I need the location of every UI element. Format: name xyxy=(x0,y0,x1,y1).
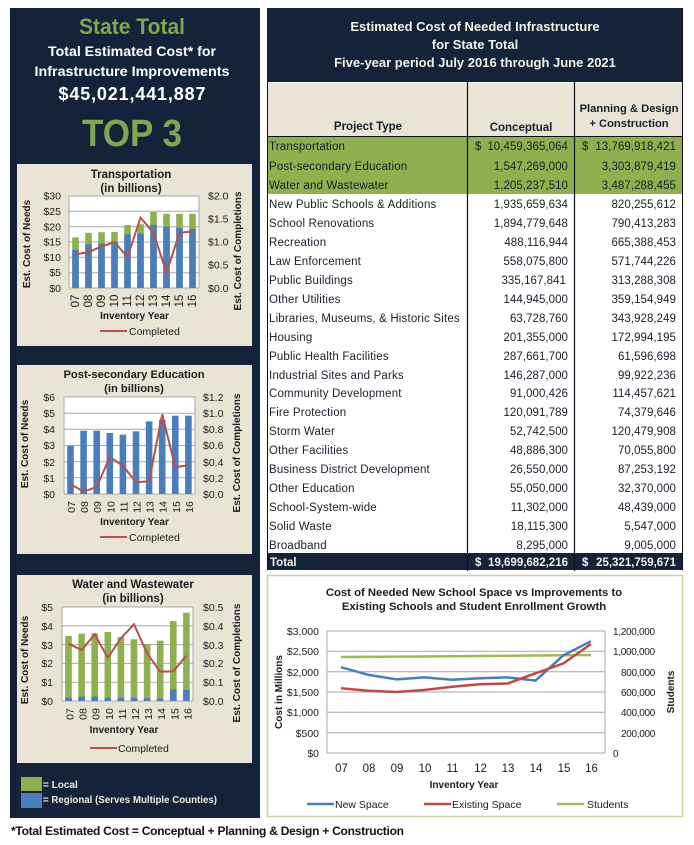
row: Other Facilities: 70,055,800 xyxy=(618,445,676,457)
left axis labels: $500 xyxy=(296,728,319,740)
row: Total xyxy=(267,553,683,570)
year labels: 12 xyxy=(132,501,144,513)
row: Housing: 172,994,195 xyxy=(611,332,676,344)
legend: Existing Space xyxy=(452,799,522,811)
right axis labels: $0.5 xyxy=(208,260,229,272)
row: Industrial Sites and Parks xyxy=(269,370,676,382)
left axis labels: $1 xyxy=(41,677,53,689)
row: New Public Schools & Additions: New Public Schools & Additions xyxy=(269,199,437,211)
row: Fire Protection: 74,379,646 xyxy=(618,407,676,419)
row: Broadband: 9,005,000 xyxy=(624,540,676,552)
row: Transportation: 13,769,918,421 xyxy=(595,141,676,153)
row: Libraries, Museums, & Historic Sites xyxy=(269,313,676,325)
row: Storm Water xyxy=(269,426,676,438)
completed line xyxy=(68,624,186,672)
right axis labels xyxy=(203,392,224,501)
row: Broadband: Broadband xyxy=(269,540,327,552)
left axis labels: $15 xyxy=(43,236,61,248)
legend: completed xyxy=(90,743,169,755)
row: Solid Waste: 5,547,000 xyxy=(624,521,676,533)
left axis labels: $0 xyxy=(43,489,55,501)
row: Public Health Facilities xyxy=(269,351,676,363)
year labels: 11 xyxy=(447,763,458,775)
axis titles: Inventory Year xyxy=(430,780,498,791)
row: Housing xyxy=(269,332,676,344)
column headers: Conceptual xyxy=(490,122,552,134)
year labels xyxy=(335,763,598,775)
row: Post-secondary Education xyxy=(269,161,676,173)
right axis labels: $0.1 xyxy=(203,677,224,689)
right axis labels xyxy=(203,602,224,708)
axis titles: Est. Cost of Needs xyxy=(20,615,31,704)
year labels: 13 xyxy=(148,295,160,307)
right axis labels: 800,000 xyxy=(621,668,656,679)
left axis labels: $5 xyxy=(49,267,61,279)
right axis labels: 600,000 xyxy=(621,688,656,699)
axis titles: Cost in Millions xyxy=(274,655,285,729)
left axis labels: $0 xyxy=(49,283,61,295)
right axis labels: 0 xyxy=(613,749,619,760)
left axis labels: $5 xyxy=(41,602,53,614)
left axis labels: $3,000 xyxy=(287,626,319,638)
row: School-System-wide xyxy=(269,502,676,514)
year labels: 11 xyxy=(118,501,130,512)
year labels: 16 xyxy=(182,708,194,720)
year labels: 09 xyxy=(92,501,104,513)
column headers: + Construction xyxy=(589,118,669,130)
right axis labels: $0.0 xyxy=(203,696,224,708)
row: Broadband xyxy=(269,540,676,552)
right axis labels xyxy=(613,627,656,760)
left axis labels: $2,500 xyxy=(287,646,319,658)
row: Recreation: 488,116,944 xyxy=(504,237,569,249)
year labels: 14 xyxy=(158,501,170,513)
row: Other Education xyxy=(269,483,676,495)
row: Public Buildings: 313,288,308 xyxy=(611,275,676,287)
row: New Public Schools & Additions: 1,935,659,634 xyxy=(494,199,569,211)
row: Transportation: $ xyxy=(582,141,589,153)
row: Storm Water: Storm Water xyxy=(269,426,335,438)
row: Other Utilities: Other Utilities xyxy=(269,294,341,306)
panel: table header: Estimated Cost of Needed Infrastructure xyxy=(350,19,600,34)
legend: completed: Completed xyxy=(129,532,180,544)
year labels: 12 xyxy=(130,708,142,720)
row: Transportation: Transportation xyxy=(269,141,345,153)
year labels: 07 xyxy=(335,763,348,775)
chart title: (in billions) xyxy=(104,383,164,395)
row: Housing: Housing xyxy=(269,332,312,344)
left axis labels: $0 xyxy=(307,748,319,760)
left axis labels: $2,000 xyxy=(287,667,319,679)
row: Industrial Sites and Parks: Industrial Sites and Parks xyxy=(269,370,404,382)
year labels: 14 xyxy=(530,763,543,775)
row: Transportation xyxy=(269,141,676,153)
year labels: 08 xyxy=(363,763,375,775)
year labels: 09 xyxy=(91,708,103,720)
row: Business District Development: Business District Development xyxy=(269,464,431,476)
row: Law Enforcement xyxy=(269,256,676,268)
row: Law Enforcement: 558,075,800 xyxy=(503,256,568,268)
year labels: 13 xyxy=(145,501,157,513)
row: Other Education: Other Education xyxy=(269,483,355,495)
row: Transportation: 10,459,365,064 xyxy=(487,141,569,153)
column headers: Project Type xyxy=(334,121,402,133)
heading: TOP 3: TOP 3 xyxy=(82,113,182,155)
right axis labels: $0.4 xyxy=(203,621,224,633)
row: Recreation: Recreation xyxy=(269,237,326,249)
axis titles: Est. Cost of Completions xyxy=(232,603,243,722)
row: Industrial Sites and Parks: 146,287,000 xyxy=(503,370,568,382)
legend: Students xyxy=(587,799,628,811)
row: Total: $ xyxy=(582,557,589,569)
row: Public Buildings xyxy=(269,275,676,287)
year labels: 15 xyxy=(174,295,186,307)
row: Other Facilities: 48,886,300 xyxy=(510,445,568,457)
right axis labels: $0.0 xyxy=(203,489,224,501)
line: Students xyxy=(341,655,591,657)
row: Public Buildings: 335,167,841 xyxy=(501,275,566,287)
right axis labels: 200,000 xyxy=(621,729,656,740)
panel: table header xyxy=(267,8,683,82)
year labels xyxy=(66,501,196,513)
row: Post-secondary Education: 3,303,879,419 xyxy=(602,161,676,173)
row: Total: $ xyxy=(475,557,482,569)
right axis labels: $0.2 xyxy=(203,658,224,670)
right axis labels: $0.4 xyxy=(203,457,224,469)
stacked bars xyxy=(72,212,196,288)
year labels: 07 xyxy=(64,708,76,720)
year labels: 08 xyxy=(83,295,95,307)
left axis labels: $3 xyxy=(43,440,55,452)
chart panel: Transportation xyxy=(17,164,252,346)
panel: left sidebar xyxy=(10,8,260,818)
right axis labels: $1.0 xyxy=(203,408,224,420)
legend: local and regional xyxy=(21,777,217,808)
year labels: 15 xyxy=(169,708,181,720)
row: School-System-wide: 11,302,000 xyxy=(511,502,568,514)
row: Libraries, Museums, & Historic Sites: 63,728,760 xyxy=(510,313,568,325)
axis titles xyxy=(20,393,243,528)
panel: table header: Five-year period July 2016 through June 2021 xyxy=(334,55,616,70)
row: Transportation: $ xyxy=(475,141,482,153)
row: Business District Development: 26,550,000 xyxy=(510,464,568,476)
legend: New Space xyxy=(335,799,389,811)
table xyxy=(267,8,683,571)
panel: school space line chart xyxy=(268,576,682,816)
row: Total: 25,321,759,671 xyxy=(596,557,677,569)
axis titles: Est. Cost of Needs xyxy=(20,399,31,488)
legend: local and regional: = Local xyxy=(43,780,78,791)
legend: completed: Completed xyxy=(118,743,169,755)
right axis labels: $0.2 xyxy=(203,473,224,485)
year labels: 13 xyxy=(502,763,514,775)
left axis labels: $30 xyxy=(43,190,61,202)
left axis labels: $1,500 xyxy=(287,687,319,699)
axis titles xyxy=(274,655,677,791)
chart title: (in billions) xyxy=(100,183,162,195)
left axis labels: $1 xyxy=(43,473,55,485)
left axis labels: $5 xyxy=(43,408,55,420)
axis titles: Inventory Year xyxy=(100,517,169,528)
year labels: 10 xyxy=(419,763,431,775)
row: Public Buildings: Public Buildings xyxy=(269,275,353,287)
left axis labels: $20 xyxy=(43,222,61,234)
row: Libraries, Museums, & Historic Sites: Libraries, Museums, & Historic Sites xyxy=(269,313,460,325)
right axis labels: $0.5 xyxy=(203,602,224,614)
row: Broadband: 8,295,000 xyxy=(516,540,568,552)
year labels: 07 xyxy=(70,295,82,307)
year labels: 14 xyxy=(161,294,173,307)
completed line xyxy=(76,218,192,273)
left axis labels: $3 xyxy=(41,640,53,652)
row: Other Utilities: 359,154,949 xyxy=(611,294,676,306)
left axis labels: $4 xyxy=(43,424,55,436)
left axis labels: $2 xyxy=(41,658,53,670)
row: Recreation: 665,388,453 xyxy=(611,237,676,249)
year labels: 12 xyxy=(474,763,487,775)
row: Business District Development xyxy=(269,464,676,476)
row: Other Facilities: Other Facilities xyxy=(269,445,348,457)
chart title: Water and Wastewater xyxy=(72,579,194,591)
year labels: 16 xyxy=(184,501,196,513)
line: New Space xyxy=(341,641,591,681)
row: Total: 19,699,682,216 xyxy=(488,557,568,569)
row: Solid Waste xyxy=(269,521,676,533)
row: Other Education: 55,050,000 xyxy=(510,483,568,495)
row: Storm Water: 52,742,500 xyxy=(510,426,568,438)
year labels: 07 xyxy=(66,501,78,513)
chart title: Existing Schools and Student Enrollment Growth xyxy=(342,601,606,613)
row: School Renovations: 790,413,283 xyxy=(611,218,676,230)
year labels: 09 xyxy=(391,763,403,775)
year labels: 15 xyxy=(558,763,570,775)
row: Fire Protection xyxy=(269,407,676,419)
line: Existing Space xyxy=(341,644,591,692)
row: Other Utilities xyxy=(269,294,676,306)
row: Water and Wastewater: 1,205,237,510 xyxy=(494,180,568,192)
row: Other Facilities xyxy=(269,445,676,457)
axis titles: Est. Cost of Completions xyxy=(233,191,244,310)
row: Libraries, Museums, & Historic Sites: 343,928,249 xyxy=(611,313,676,325)
row: Community Development: Community Development xyxy=(269,388,402,400)
legend: completed: Completed xyxy=(129,326,180,338)
left axis labels xyxy=(41,602,53,708)
left axis labels xyxy=(287,626,319,760)
row: Water and Wastewater xyxy=(269,180,676,192)
chart title: (in billions) xyxy=(102,593,164,605)
row: Total: Total xyxy=(270,557,297,569)
row: Law Enforcement: 571,744,226 xyxy=(611,256,676,268)
panel: table header: for State Total xyxy=(432,37,518,52)
row: School Renovations xyxy=(269,218,676,230)
row: Post-secondary Education: 1,547,269,000 xyxy=(494,161,568,173)
row: Industrial Sites and Parks: 99,922,236 xyxy=(618,370,676,382)
left axis labels: $1,000 xyxy=(287,707,319,719)
chart title: Transportation xyxy=(91,169,171,181)
axis titles xyxy=(22,191,244,322)
right axis labels: $1.5 xyxy=(208,214,229,226)
row: New Public Schools & Additions xyxy=(269,199,676,211)
chart title: Cost of Needed New School Space vs Improvements to xyxy=(326,587,622,599)
right axis labels: $2.0 xyxy=(208,190,229,202)
stacked bars xyxy=(65,613,190,701)
right axis labels: $0.0 xyxy=(208,283,229,295)
year labels: 10 xyxy=(104,708,116,720)
top 3 highlighted rows background xyxy=(268,137,682,194)
row: Housing: 201,355,000 xyxy=(503,332,568,344)
year labels: 15 xyxy=(171,501,183,513)
row: School Renovations: School Renovations xyxy=(269,218,374,230)
row: Business District Development: 87,253,192 xyxy=(618,464,676,476)
row: Public Health Facilities: 287,661,700 xyxy=(503,351,568,363)
legend xyxy=(307,799,628,811)
year labels: 13 xyxy=(143,708,155,720)
row: Other Education: 32,370,000 xyxy=(618,483,676,495)
right axis labels: 1,000,000 xyxy=(613,647,656,658)
row: Recreation xyxy=(269,237,676,249)
left axis labels xyxy=(43,190,61,295)
axis titles: Inventory Year xyxy=(100,311,169,322)
legend: local and regional: = Regional (Serves Multiple Counties) xyxy=(43,795,217,806)
year labels: 08 xyxy=(79,501,91,513)
row: Solid Waste: 18,115,300 xyxy=(511,521,568,533)
column headers xyxy=(268,83,682,136)
footnote: *Total Estimated Cost = Conceptual + Planning & Design + Construction xyxy=(11,824,404,838)
row: Law Enforcement: Law Enforcement xyxy=(269,256,362,268)
chart panel: Water and Wastewater xyxy=(17,575,252,763)
axis titles: Est. Cost of Completions xyxy=(232,393,243,512)
row: School-System-wide: School-System-wide xyxy=(269,502,377,514)
column headers: Planning & Design xyxy=(580,103,679,115)
axis titles: Students xyxy=(666,670,677,713)
year labels: 16 xyxy=(187,295,199,307)
left axis labels: $0 xyxy=(41,696,53,708)
legend: completed xyxy=(100,326,180,338)
right axis labels: 400,000 xyxy=(621,708,656,719)
left axis labels xyxy=(43,392,55,501)
year labels: 11 xyxy=(117,708,129,719)
right axis labels: $0.8 xyxy=(203,424,224,436)
right axis labels: $0.6 xyxy=(203,440,224,452)
row: Public Health Facilities: Public Health Facilities xyxy=(269,351,389,363)
legend: completed xyxy=(100,532,180,544)
row: School Renovations: 1,894,779,648 xyxy=(494,218,568,230)
total cost figure: $45,021,441,887 xyxy=(58,84,206,104)
right axis labels: $0.3 xyxy=(203,640,224,652)
row: Fire Protection: Fire Protection xyxy=(269,407,346,419)
left axis labels: $10 xyxy=(43,252,61,264)
completed line xyxy=(70,414,188,492)
left axis labels: $2 xyxy=(43,457,55,469)
year labels: 09 xyxy=(96,295,108,307)
axis titles: Est. Cost of Needs xyxy=(22,199,33,288)
right axis labels: $1.2 xyxy=(203,392,224,404)
row: Community Development xyxy=(269,388,676,400)
row: New Public Schools & Additions: 820,255,612 xyxy=(611,199,676,211)
year labels: 11 xyxy=(122,295,134,307)
row: Community Development: 91,000,426 xyxy=(510,388,568,400)
year labels: 12 xyxy=(135,295,147,307)
row: Fire Protection: 120,091,789 xyxy=(503,407,568,419)
subheading: infrastructure improvements: Infrastructure Improvements xyxy=(34,63,230,79)
right axis labels xyxy=(208,190,229,295)
row: School-System-wide: 48,439,000 xyxy=(618,502,676,514)
axis titles xyxy=(20,603,243,736)
chart panel: Post-secondary Education xyxy=(17,365,252,554)
left axis labels: $25 xyxy=(43,206,61,218)
year labels xyxy=(70,294,199,307)
row: Public Health Facilities: 61,596,698 xyxy=(618,351,676,363)
row: Post-secondary Education: Post-secondary Education xyxy=(269,161,407,173)
year labels: 10 xyxy=(105,501,117,513)
right axis labels: $1.0 xyxy=(208,236,229,248)
left axis labels: $6 xyxy=(43,392,55,404)
row: Community Development: 114,457,621 xyxy=(612,388,676,400)
year labels: 14 xyxy=(156,708,168,720)
row: Storm Water: 120,479,908 xyxy=(611,426,676,438)
right axis labels: 1,200,000 xyxy=(613,627,656,638)
subheading: total estimated cost: Total Estimated Cost* for xyxy=(48,43,217,59)
row: Other Utilities: 144,945,000 xyxy=(503,294,568,306)
year labels: 10 xyxy=(109,295,121,307)
year labels: 16 xyxy=(585,763,598,775)
row: Water and Wastewater: 3,487,288,455 xyxy=(602,180,676,192)
left axis labels: $4 xyxy=(41,621,53,633)
chart title: Post-secondary Education xyxy=(63,369,205,381)
year labels xyxy=(64,708,194,720)
axis titles: Inventory Year xyxy=(90,725,158,736)
bars xyxy=(67,416,192,494)
year labels: 08 xyxy=(78,708,90,720)
row: Water and Wastewater: Water and Wastewater xyxy=(269,180,389,192)
row: Solid Waste: Solid Waste xyxy=(269,521,332,533)
heading: State Total: State Total xyxy=(79,14,185,39)
